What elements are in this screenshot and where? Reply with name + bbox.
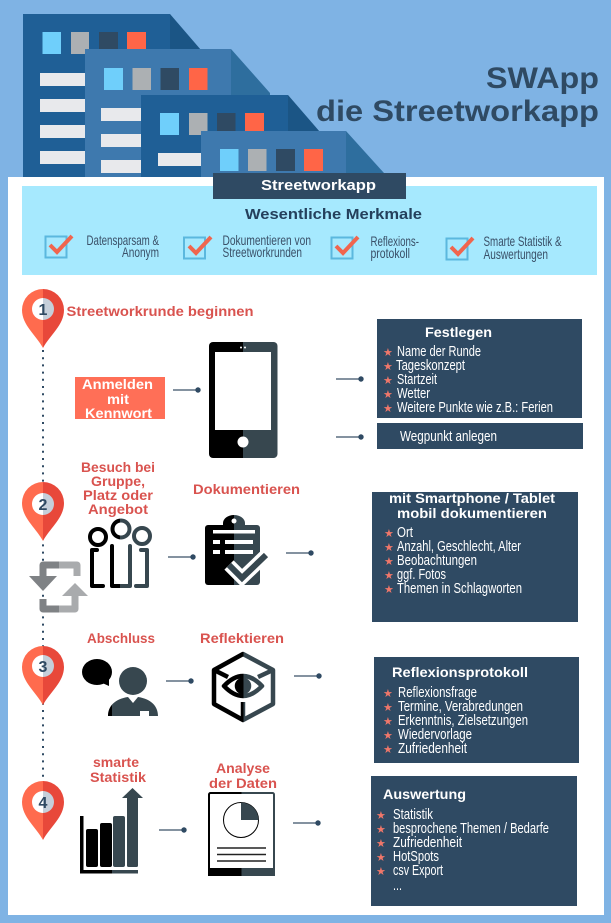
title (316, 62, 599, 128)
heading: Besuch bei Gruppe: Platz oder (83, 487, 154, 503)
panel: Reflexionsprotokoll: Erkenntnis, Zielsetzungen (398, 713, 528, 729)
panel: Festlegen: Startzeit (397, 372, 437, 388)
panel: Festlegen: Wetter (397, 386, 430, 402)
panel: Reflexionsprotokoll: ★ (383, 687, 393, 700)
panel: Auswertung: Statistik (393, 807, 434, 823)
main white panel (8, 177, 604, 915)
panel: Festlegen: Tageskonzept (396, 358, 465, 374)
panel: mobil dokumentieren: mobil dokumentieren (397, 505, 547, 521)
feature: Datensparsam: Anonym (122, 244, 159, 260)
icon: group of people (90, 520, 150, 586)
feature: Smarte Statistik: Auswertungen (484, 246, 548, 262)
feature: Smarte Statistik (446, 233, 562, 262)
arrow: phone to Festlegen (336, 376, 364, 382)
panel: Festlegen: ★ (383, 402, 393, 415)
heading: Wesentliche Merkmale: Wesentliche Merkmale (245, 206, 422, 223)
button: Anmelden mit Kennwort: Kennwort (85, 405, 152, 421)
pin 2 (22, 482, 64, 541)
panel: Auswertung: HotSpots (393, 849, 439, 865)
panel: Auswertung: ... (393, 878, 402, 894)
pin 2: 2 (39, 497, 48, 514)
panel: Reflexionsprotokoll: ★ (383, 743, 393, 756)
panel: Auswertung: csv Export (393, 863, 443, 879)
icon: report document (208, 793, 275, 876)
panel: Festlegen (377, 319, 582, 418)
pin 3 (22, 646, 64, 705)
panel: Auswertung: ★ (376, 823, 386, 836)
icon: bar chart with arrow (80, 788, 143, 874)
panel: Festlegen: Weitere Punkte wie z.B.: Ferien (397, 400, 553, 416)
dotted timeline (42, 350, 44, 782)
panel: mobil dokumentieren: Themen in Schlagworten (397, 581, 522, 597)
icon: hexagon with eye (214, 654, 273, 720)
panel: Auswertung: Auswertung (383, 786, 466, 802)
heading: Analyse der Daten: der Daten (209, 775, 277, 791)
arrow: phone to Wegpunkt (336, 434, 364, 440)
heading bar: Streetworkapp: Streetworkapp (261, 177, 376, 194)
heading: Dokumentieren: Dokumentieren (193, 481, 300, 497)
feature: Reflexionsprotokoll (332, 233, 419, 261)
panel: Reflexionsprotokoll: Termine, Verabredungen (398, 699, 523, 715)
panel: Festlegen: ★ (383, 346, 393, 359)
arrow: person to hexagon (166, 678, 194, 684)
panel: mobil dokumentieren (372, 490, 578, 622)
panel: Auswertung: ★ (376, 809, 386, 822)
icon: smartphone (209, 342, 278, 458)
panel: Festlegen: Name der Runde (397, 344, 481, 360)
panel: Auswertung: ★ (376, 837, 386, 850)
pin 1 (22, 289, 64, 348)
panel: mobil dokumentieren: Anzahl, Geschlecht, Alter (397, 539, 521, 555)
panel: mobil dokumentieren: Beobachtungen (397, 553, 477, 569)
panel: wesentliche Merkmale (22, 186, 597, 275)
button: Anmelden mit Kennwort: Anmelden (82, 376, 153, 392)
pin 4 (22, 781, 64, 840)
heading bar: Streetworkapp (213, 173, 406, 199)
arrow: chart to document (159, 827, 187, 833)
heading: Streetworkrunde beginnen: Streetworkrunde beginnen (66, 303, 254, 319)
button: Anmelden mit Kennwort (75, 376, 165, 421)
panel: Reflexionsprotokoll: Zufriedenheit (398, 741, 467, 757)
arrow: document to panel (293, 820, 321, 826)
panel: Festlegen: ★ (383, 374, 393, 387)
panel: Reflexionsprotokoll: Wiedervorlage (398, 727, 472, 743)
panel: Auswertung (371, 776, 577, 906)
icon: refresh arrows (29, 565, 88, 609)
panel: mobil dokumentieren: ★ (384, 541, 394, 554)
panel: mobil dokumentieren: ★ (384, 583, 394, 596)
panel: Auswertung: besprochene Themen / Bedarfe (393, 821, 549, 837)
panel: Reflexionsprotokoll: Reflexionsprotokoll (392, 664, 528, 680)
illustration: city buildings (23, 14, 384, 177)
panel: mobil dokumentieren: ★ (384, 527, 394, 540)
feature: Datensparsam: Datensparsam & (86, 232, 159, 248)
panel: Reflexionsprotokoll (374, 657, 579, 763)
title: SWApp (486, 62, 599, 95)
feature: Dokumentieren: Streetworkrunden (222, 244, 302, 260)
panel: mobil dokumentieren: mit Smartphone / Tablet (389, 490, 555, 506)
feature: Dokumentieren: Dokumentieren von (222, 232, 311, 248)
panel: mobil dokumentieren: ggf. Fotos (397, 567, 446, 583)
panel: Festlegen: Festlegen (425, 324, 492, 340)
panel: Festlegen: ★ (383, 360, 393, 373)
pin 3: 3 (39, 659, 48, 676)
panel: Festlegen: ★ (383, 388, 393, 401)
heading: smarte Statistik (90, 754, 146, 785)
panel: mobil dokumentieren: ★ (384, 555, 394, 568)
title: die Streetworkapp (316, 95, 599, 128)
heading: Reflektieren: Reflektieren (200, 630, 284, 646)
heading: Besuch bei Gruppe (81, 459, 155, 517)
panel: Wegpunkt anlegen: Wegpunkt anlegen (400, 429, 497, 445)
panel: Reflexionsprotokoll: ★ (383, 715, 393, 728)
icon: person with speech bubble (82, 659, 158, 716)
panel: mobil dokumentieren: ★ (384, 569, 394, 582)
arrow: group to clipboard (168, 554, 196, 560)
arrow: clipboard to panel (286, 550, 314, 556)
pin 4: 4 (39, 795, 48, 812)
arrow: login to phone (173, 387, 201, 393)
panel: Reflexionsprotokoll: Reflexionsfrage (398, 685, 477, 701)
feature: Reflexionsprotokoll: Reflexions- (370, 233, 419, 249)
feature: Reflexionsprotokoll: protokoll (370, 245, 410, 261)
panel: mobil dokumentieren: Ort (397, 525, 413, 541)
feature: Dokumentieren (184, 232, 311, 260)
heading: Analyse der Daten: Analyse (216, 760, 270, 776)
panel: Wegpunkt anlegen (377, 423, 583, 449)
feature: Datensparsam (46, 232, 159, 260)
icon: clipboard with check (205, 515, 266, 585)
heading: smarte Statistik: Statistik (90, 769, 146, 785)
heading: Besuch bei Gruppe: Angebot (88, 501, 148, 517)
panel: Reflexionsprotokoll: ★ (383, 701, 393, 714)
heading: Abschluss: Abschluss (87, 630, 155, 646)
panel: Reflexionsprotokoll: ★ (383, 729, 393, 742)
button: Anmelden mit Kennwort: mit (107, 391, 129, 407)
heading: Besuch bei Gruppe: Besuch bei (81, 459, 155, 475)
panel: Auswertung: ★ (376, 865, 386, 878)
arrow: hexagon to panel (294, 673, 322, 679)
heading: Analyse der Daten (209, 760, 277, 791)
feature: Smarte Statistik: Smarte Statistik & (484, 233, 562, 249)
panel: Auswertung: ★ (376, 851, 386, 864)
heading: smarte Statistik: smarte (93, 754, 139, 770)
heading: Besuch bei Gruppe: Gruppe, (91, 473, 145, 489)
panel: Auswertung: Zufriedenheit (393, 835, 462, 851)
pin 1: 1 (39, 302, 48, 319)
